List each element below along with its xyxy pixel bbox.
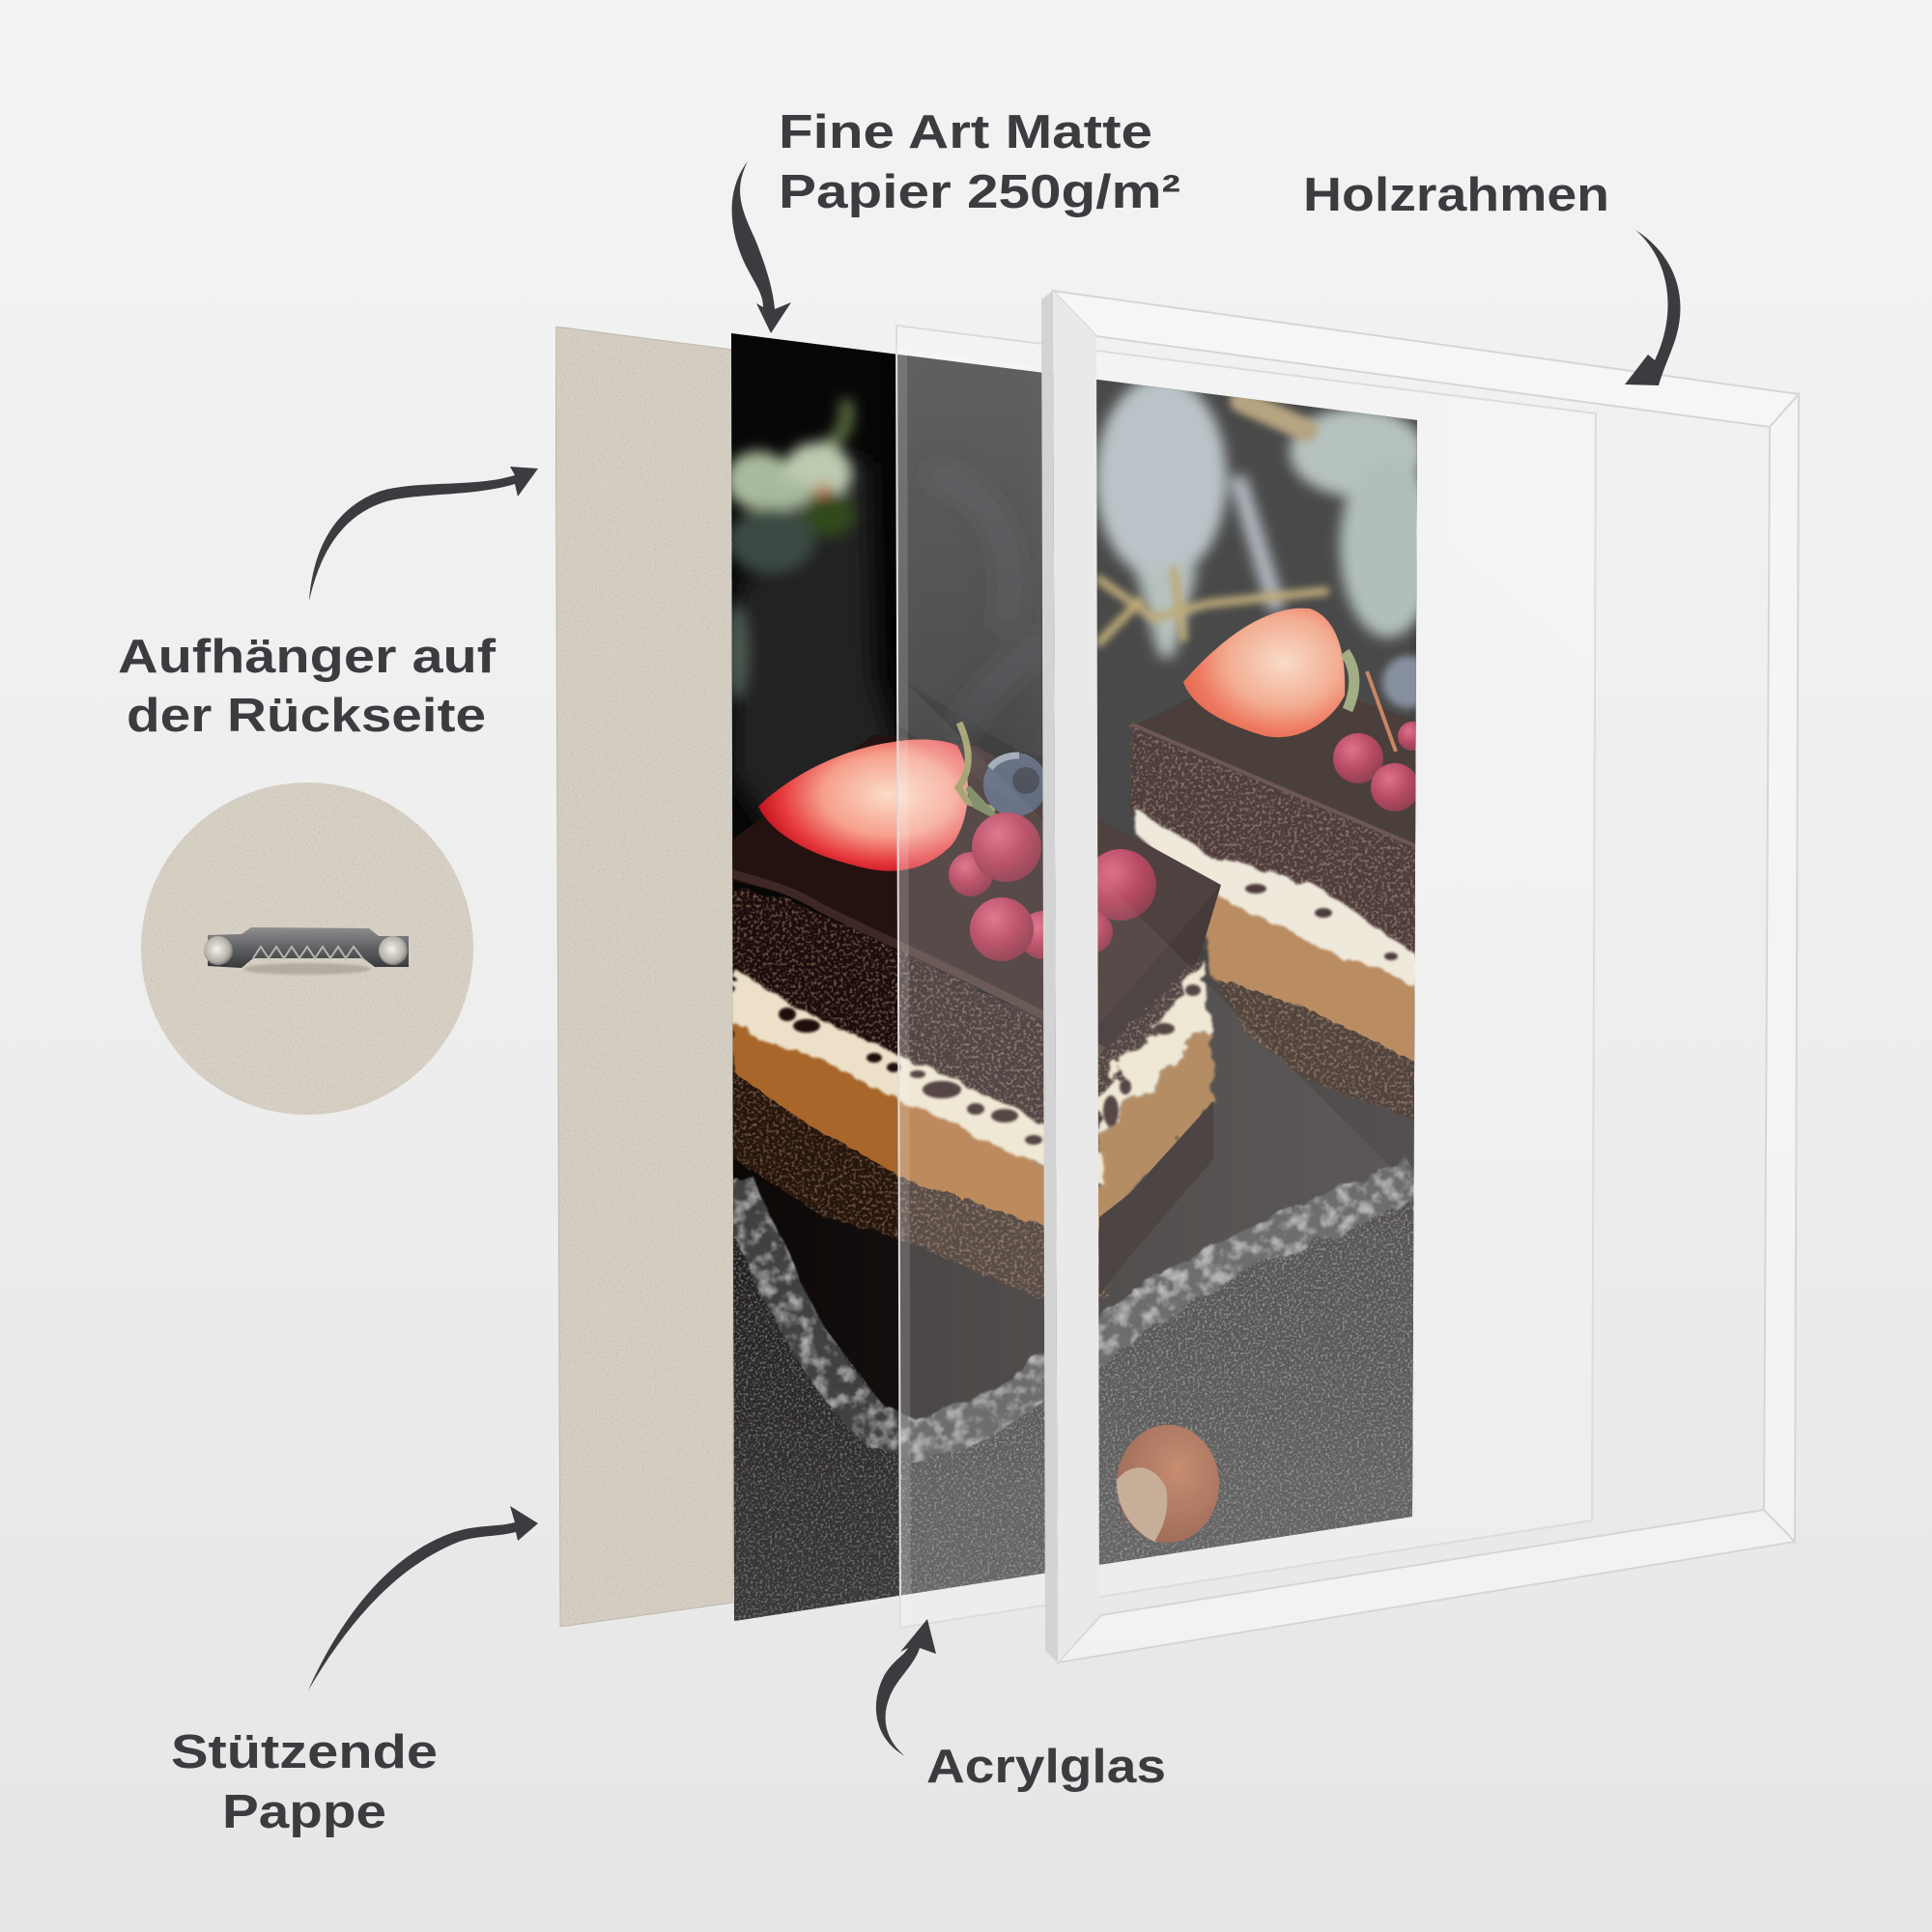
heading: Stützende Pappe: Stützende (171, 1726, 438, 1778)
eucalyptus right (1095, 377, 1436, 657)
currants (949, 812, 1156, 961)
arrow: to cardboard (308, 1506, 538, 1690)
front cake cream (731, 966, 1103, 1183)
arrow: to print paper (732, 161, 791, 333)
table surface (724, 1159, 1430, 1633)
heading: Fine Art Matte Papier: Fine Art Matte (779, 106, 1152, 158)
panel: fine art print with cake photo (724, 319, 1436, 1633)
front strawberry (758, 723, 995, 871)
heading: Stützende Pappe (171, 1726, 438, 1838)
front cake (731, 734, 1398, 1299)
front cake caramel (731, 1022, 1106, 1232)
panel: wooden frame (1041, 291, 1799, 1662)
heading: Aufhänger auf der Rückseite (118, 631, 497, 742)
panel: supporting cardboard backing (555, 327, 733, 1627)
photo background (724, 319, 1430, 1633)
heading: Fine Art Matte Papier: Papier 250g/m² (779, 166, 1180, 218)
cream speckles (779, 884, 1398, 1145)
heading: Aufhänger auf der Rückseite: Aufhänger auf (118, 631, 497, 683)
back cake (1128, 696, 1416, 1119)
hazelnut (1117, 1425, 1219, 1543)
panel: acrylic glass sheet (896, 326, 1596, 1628)
back strawberry (1183, 609, 1435, 811)
arrow: to acrylic glass (876, 1619, 936, 1756)
slate plate surface (724, 918, 1430, 1439)
arrow: to wooden frame (1625, 230, 1680, 385)
icon: sawtooth hanger (204, 927, 409, 975)
slate plate rim (733, 1174, 1415, 1439)
heading: Acrylglas: Acrylglas (926, 1741, 1166, 1793)
lower sponge (731, 1070, 1106, 1299)
heading: Holzrahmen: Holzrahmen (1303, 169, 1609, 221)
heading: Aufhänger auf der Rückseite: der Rückseite (127, 690, 486, 742)
arrow: to hanger side (309, 467, 538, 601)
heading: Fine Art Matte Papier (779, 106, 1180, 218)
callout: hanger detail circle (141, 782, 473, 1115)
heading: Stützende Pappe: Pappe (222, 1786, 386, 1838)
blueberry (983, 753, 1047, 816)
eucalyptus left (725, 406, 856, 700)
